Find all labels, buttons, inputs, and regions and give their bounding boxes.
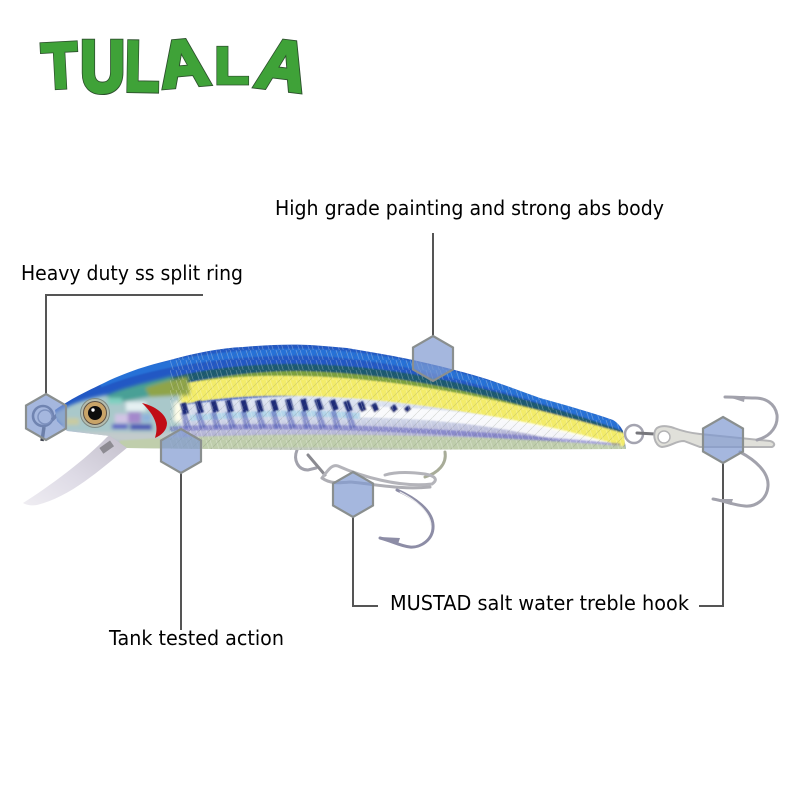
label: high grade painting: High grade painting and strong abs body — [275, 196, 664, 220]
logo: TULALA: A — [152, 25, 214, 103]
silver lower body — [50, 396, 630, 455]
logo: TULALA: L — [124, 26, 160, 107]
logo: TULALA: A — [152, 25, 214, 103]
leader line: tank tested — [180, 473, 182, 630]
leader line: painting — [432, 233, 434, 336]
eye — [80, 398, 110, 428]
rear hook behind — [425, 452, 445, 477]
upper hook — [725, 397, 777, 440]
shank and loop — [322, 466, 435, 485]
lure lip — [23, 435, 128, 505]
lure body — [55, 344, 626, 450]
front hook — [380, 490, 433, 547]
logo: TULALA: T — [40, 29, 79, 102]
label: tank tested: Tank tested action — [108, 626, 284, 650]
green speckle band — [188, 370, 543, 411]
label: treble hook: MUSTAD salt water treble hook — [390, 591, 689, 615]
tail ring — [625, 425, 643, 443]
leader line: tail hook — [699, 463, 723, 606]
marker: belly hook — [333, 472, 373, 517]
icon: nose split ring — [33, 406, 58, 441]
marker: body — [413, 336, 453, 381]
belly treble hook — [296, 450, 445, 547]
label: split ring: Heavy duty ss split ring — [21, 261, 243, 285]
marker: nose ring — [26, 394, 66, 440]
yellow band — [170, 386, 625, 444]
side flash — [360, 412, 610, 448]
lavender stripe — [170, 427, 620, 446]
logo: TULALA — [40, 24, 317, 108]
tail treble hook — [625, 396, 777, 506]
logo: TULALA: U — [80, 27, 125, 108]
scale texture — [170, 345, 630, 455]
logo: TULALA: T — [40, 29, 79, 102]
dark teal band — [120, 368, 625, 436]
logo: TULALA: L — [215, 37, 249, 95]
holographic head — [56, 374, 192, 441]
side dashes — [183, 411, 353, 428]
dorsal blue — [55, 344, 626, 449]
logo: TULALA: L — [215, 37, 249, 95]
marker: tail hook — [703, 417, 743, 463]
eye loop and shank — [654, 426, 774, 447]
hook eye on belly — [296, 450, 316, 470]
pale green belly — [120, 441, 630, 453]
logo: TULALA: L — [124, 26, 160, 107]
leader line: belly hook — [353, 517, 378, 606]
lower hook — [713, 452, 768, 506]
logo: TULALA: U — [80, 27, 125, 108]
gill mark — [142, 403, 167, 438]
marker: tank tested — [161, 429, 201, 473]
logo: TULALA: A — [250, 24, 317, 107]
logo: TULALA: A — [250, 24, 317, 107]
leader line: split ring — [46, 295, 203, 394]
